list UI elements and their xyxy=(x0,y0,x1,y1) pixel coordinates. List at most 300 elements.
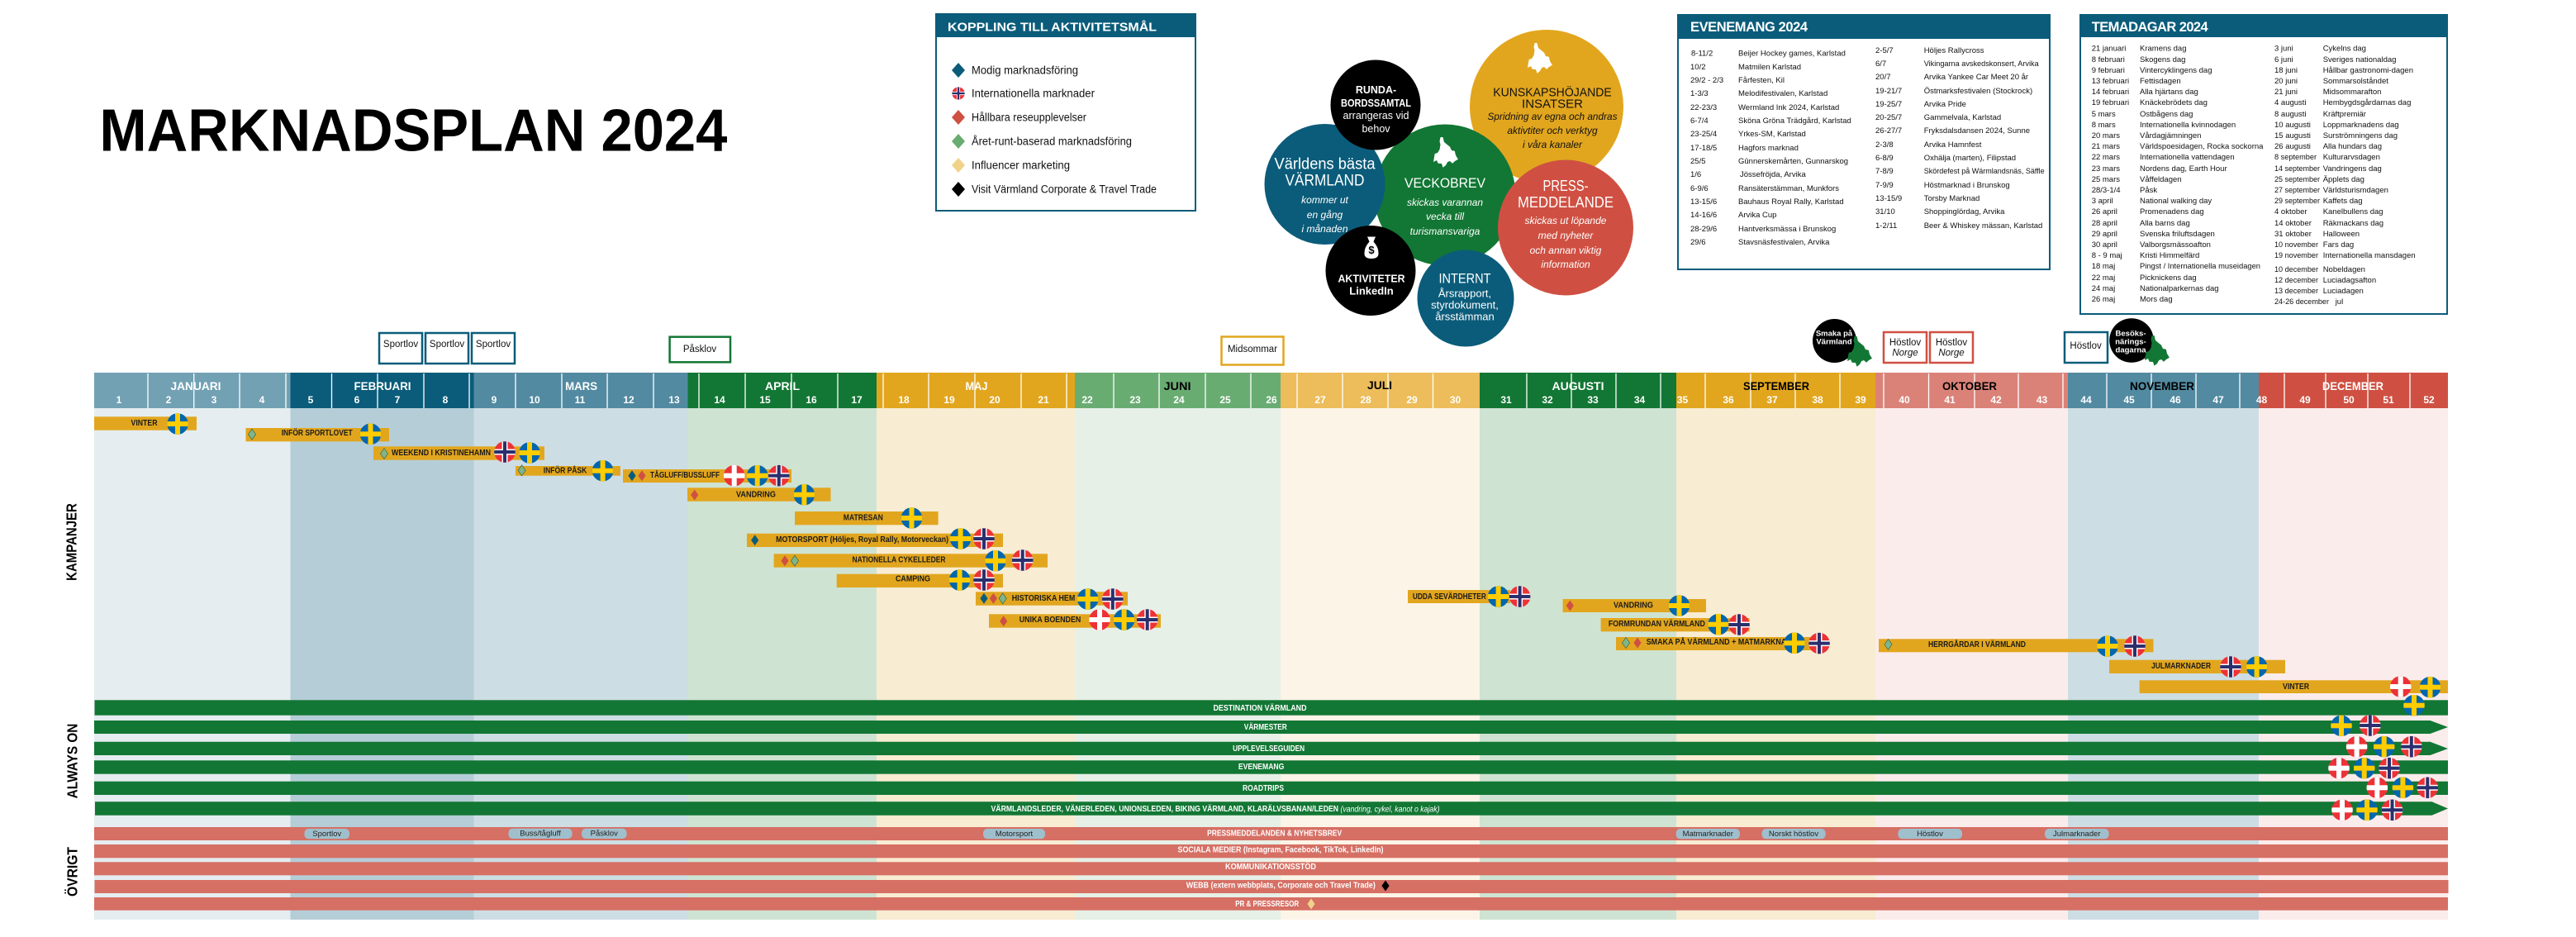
section label: övrigt: ÖVRIGT xyxy=(64,847,80,897)
holiday: höstlov norge vecka 41: Norge xyxy=(1938,349,1965,359)
panel: legend koppling till aktivitetsmål xyxy=(935,13,1196,211)
list: temadagar juni–december: Luciadagen xyxy=(2323,287,2364,296)
campaign rows xyxy=(94,413,2448,698)
always on: evenemang xyxy=(94,758,2448,779)
list: temadagar januari–maj: Valborgsmässoafton xyxy=(2140,240,2211,250)
list: temadagar juni–december: 6 juni xyxy=(2274,55,2293,64)
campaign: vandring vår: VANDRING xyxy=(736,491,776,499)
list: temadagar januari–maj: 28/3-1/4 xyxy=(2092,186,2121,195)
always on: destination värmland: DESTINATION VÄRMLAND xyxy=(1213,702,1307,713)
list: temadagar juni–december: Sommarsolståndet xyxy=(2323,77,2388,86)
campaign: motorsport xyxy=(747,528,1003,549)
month labels: AUGUSTI xyxy=(1552,379,1604,392)
week numbers: 52 xyxy=(2423,394,2435,406)
list: evenemang juli–november: 13-15/9 xyxy=(1875,194,1902,203)
bubble: kunskapshöjande insatser: i våra kanaler xyxy=(1523,139,1583,150)
week numbers: 8 xyxy=(443,394,449,406)
week numbers: 39 xyxy=(1855,394,1866,406)
holiday: sportlov vecka 8 xyxy=(425,333,468,364)
list: temadagar juni–december: 8 augusti xyxy=(2274,110,2307,119)
panel: evenemang 2024: EVENEMANG 2024 xyxy=(1690,20,1808,35)
week numbers: 18 xyxy=(898,394,910,406)
month labels: JANUARI xyxy=(170,379,221,392)
event bubble: smaka på värmland xyxy=(1813,319,1872,367)
week numbers: 13 xyxy=(668,394,680,406)
list: evenemang januari–juni: 13-15/6 xyxy=(1690,197,1717,207)
holiday: sportlov vecka 9: Sportlov xyxy=(476,340,511,350)
legend item: hållbara reseupplevelser: Hållbara reseupplevelser xyxy=(972,111,1086,124)
bubble: pressmeddelande: PRESS- xyxy=(1543,178,1588,194)
always-on rows xyxy=(94,695,2448,820)
övrigt: sociala medier: SOCIALA MEDIER (Instagram, Facebook, TikTok, LinkedIn) xyxy=(1178,846,1383,854)
legend item: visit värmland corporate & travel trade: Visit Värmland Corporate & Travel Trade xyxy=(972,183,1157,195)
campaign: unika boenden: UNIKA BOENDEN xyxy=(1019,616,1081,625)
list: temadagar januari–maj: Alla hjärtans dag xyxy=(2140,88,2198,97)
holiday: påsklov xyxy=(670,337,730,362)
list: temadagar juni–december: 10 augusti xyxy=(2274,121,2311,130)
campaign: herrgårdar i värmland: HERRGÅRDAR I VÄRMLAND xyxy=(1928,639,2026,649)
campaign: herrgårdar i värmland xyxy=(1879,635,2153,657)
list: evenemang januari–juni: 8-11/2 xyxy=(1691,50,1713,58)
event bubble: smaka på värmland: Smaka på xyxy=(1816,329,1853,339)
holiday: höstlov norge vecka 40 xyxy=(1884,332,1927,363)
legend item: året-runt-baserad marknadsföring: Året-runt-baserad marknadsföring xyxy=(972,136,1132,147)
bubble: internt xyxy=(1418,250,1514,347)
week numbers: 5 xyxy=(308,394,314,406)
list: evenemang januari–juni xyxy=(1690,50,1851,247)
bubble: kunskapshöjande insatser: aktivtiter och verktyg xyxy=(1507,125,1598,136)
legend item: modig marknadsföring: Modig marknadsföring xyxy=(972,64,1078,76)
week numbers: 4 xyxy=(259,394,265,406)
list: temadagar januari–maj: 26 maj xyxy=(2092,295,2115,304)
pill: sportlov: Sportlov xyxy=(312,830,341,839)
list: evenemang juli–november: Skördefest på Wärmlandsnäs, Säffle xyxy=(1924,167,2045,176)
month labels: FEBRUARI xyxy=(354,379,411,392)
list: evenemang januari–juni: Hantverksmässa i Brunskog xyxy=(1738,225,1836,234)
list: evenemang juli–november: 20-25/7 xyxy=(1875,113,1902,122)
list: temadagar juni–december: Vandringens dag xyxy=(2323,164,2382,174)
list: evenemang juli–november: 19-25/7 xyxy=(1875,100,1902,109)
list: temadagar juni–december: Internationella mansdagen xyxy=(2323,251,2416,260)
list: temadagar januari–maj: 9 februari xyxy=(2092,66,2125,75)
month labels: OKTOBER xyxy=(1942,379,1997,392)
list: temadagar juni–december: Nobeldagen xyxy=(2323,265,2365,274)
bubble: pressmeddelande xyxy=(1498,160,1633,296)
list: temadagar juni–december: Alla hundars dag xyxy=(2323,142,2382,151)
list: temadagar juni–december: Sveriges nationaldag xyxy=(2323,55,2396,64)
list: temadagar januari–maj: Pingst / Internationella museidagen xyxy=(2140,262,2260,271)
list: temadagar januari–maj: 21 januari xyxy=(2092,45,2126,53)
bubble: världens bästa värmland: en gång xyxy=(1307,209,1343,221)
list: temadagar juni–december: Midsommarafton xyxy=(2323,88,2381,97)
list: temadagar januari–maj: Internationella vattendagen xyxy=(2140,153,2235,162)
panel: temadagar 2024: TEMADAGAR 2024 xyxy=(2092,20,2209,35)
list: evenemang januari–juni: Hagfors marknad xyxy=(1738,144,1799,153)
list: evenemang januari–juni: 1/6 xyxy=(1690,170,1701,179)
list: evenemang juli–november: Gammelvala, Karlstad xyxy=(1924,113,2001,122)
list: evenemang januari–juni: Fårfesten, Kil xyxy=(1738,76,1785,85)
list: evenemang januari–juni: 6-7/4 xyxy=(1690,117,1709,126)
week numbers: 46 xyxy=(2170,394,2181,406)
list: temadagar juni–december: Surströmningens dag xyxy=(2323,131,2398,140)
list: temadagar januari–maj: 21 mars xyxy=(2092,142,2120,151)
övrigt: pr & pressresor: PR & PRESSRESOR xyxy=(1235,900,1300,909)
list: temadagar juni–december: Fars dag xyxy=(2323,240,2354,250)
holiday: sportlov vecka 7 xyxy=(379,333,422,364)
list: temadagar juni–december: Kanelbullens dag xyxy=(2323,207,2384,216)
bubble: världens bästa värmland: VÄRMLAND xyxy=(1286,172,1365,190)
list: temadagar januari–maj: 13 februari xyxy=(2092,77,2129,86)
always on: destination värmland xyxy=(94,695,2448,716)
list: evenemang juli–november: 31/10 xyxy=(1875,207,1895,216)
legend item: internationella marknader: Internationella marknader xyxy=(972,88,1095,99)
bubble: aktiviteter linkedin: LinkedIn xyxy=(1349,284,1394,297)
campaign: vinter start: VINTER xyxy=(131,419,158,428)
list: evenemang januari–juni: Stavsnäsfestivalen, Arvika xyxy=(1738,238,1830,247)
week numbers: 29 xyxy=(1406,394,1418,406)
list: temadagar januari–maj: Picknickens dag xyxy=(2140,273,2197,283)
holiday: sportlov vecka 8: Sportlov xyxy=(430,340,464,350)
övrigt: webb xyxy=(94,880,2449,893)
week numbers: 14 xyxy=(714,394,725,406)
always on: evenemang: EVENEMANG xyxy=(1238,763,1285,772)
list: evenemang juli–november: Shoppinglördag, Arvika xyxy=(1924,207,2005,216)
week numbers: 9 xyxy=(492,394,497,406)
week numbers: 7 xyxy=(395,394,401,406)
icon: värmland silhouette white xyxy=(1528,43,1552,74)
övrigt: pressmeddelanden & nyhetsbrev: PRESSMEDDELANDEN & NYHETSBREV xyxy=(1207,830,1342,838)
campaign: formrundan värmland xyxy=(1601,614,1750,635)
list: temadagar januari–maj: Skogens dag xyxy=(2140,55,2185,64)
week numbers: 38 xyxy=(1812,394,1823,406)
month labels: APRIL xyxy=(765,379,800,392)
holiday: höstlov norge vecka 41: Höstlov xyxy=(1936,338,1967,348)
week numbers: 12 xyxy=(623,394,634,406)
week numbers: 11 xyxy=(575,394,586,406)
bubble: pressmeddelande: MEDDELANDE xyxy=(1518,194,1614,211)
list: evenemang januari–juni: Beijer Hockey games, Karlstad xyxy=(1738,50,1846,58)
list: evenemang juli–november: Arvika Yankee Car Meet 20 år xyxy=(1924,73,2028,82)
week numbers: 25 xyxy=(1219,394,1231,406)
week numbers: 31 xyxy=(1500,394,1512,406)
list: temadagar juni–december: Kulturarvsdagen xyxy=(2323,153,2380,162)
holiday: midsommar xyxy=(1221,337,1284,365)
bubble: internt: INTERNT xyxy=(1439,271,1490,286)
list: evenemang januari–juni: 29/2 - 2/3 xyxy=(1690,76,1723,85)
list: evenemang januari–juni: 10/2 xyxy=(1690,63,1705,72)
övrigt: kommunikationsstöd xyxy=(94,861,2448,875)
list: evenemang januari–juni: Gûnnerskemårten, Gunnarskog xyxy=(1738,157,1848,166)
list: evenemang juli–november: Torsby Marknad xyxy=(1924,194,1980,203)
campaign: camping: CAMPING xyxy=(896,575,930,583)
list: evenemang januari–juni: Sköna Gröna Trädgård, Karlstad xyxy=(1738,117,1851,126)
month labels xyxy=(170,378,2384,392)
list: temadagar januari–maj: 22 maj xyxy=(2092,273,2115,283)
list: evenemang januari–juni: 1-3/3 xyxy=(1690,89,1709,98)
always on: värmlandsleder xyxy=(95,799,2448,820)
campaign: vandring vår xyxy=(687,484,831,506)
list: evenemang juli–november: Höstmarknad i Brunskog xyxy=(1924,181,2010,190)
event bubble: besöksnäringsdagarna: dagarna xyxy=(2116,345,2146,355)
section label: always on: ALWAYS ON xyxy=(64,724,80,798)
month labels: MARS xyxy=(565,379,597,392)
bubble: världens bästa värmland: kommer ut xyxy=(1301,194,1348,206)
week numbers: 50 xyxy=(2343,394,2355,406)
list: temadagar januari–maj: Internationella kvinnodagen xyxy=(2140,121,2236,130)
week numbers: 16 xyxy=(806,394,817,406)
bubble: veckobrev: vecka till xyxy=(1426,211,1464,222)
list: evenemang juli–november: Oxhälja (marten), Filipstad xyxy=(1924,154,2016,163)
list: temadagar januari–maj: Knäckebrödets dag xyxy=(2140,98,2208,107)
list: evenemang januari–juni: 14-16/6 xyxy=(1690,211,1717,220)
holiday: höstlov norge vecka 40: Norge xyxy=(1892,349,1918,359)
legend item: modig marknadsföring xyxy=(952,63,1078,78)
list: temadagar juni–december: 24-26 december xyxy=(2274,297,2329,307)
panel: evenemang 2024 xyxy=(1677,14,2051,269)
bubble: världens bästa värmland: Världens bästa xyxy=(1274,155,1376,174)
week numbers: 33 xyxy=(1587,394,1599,406)
list: temadagar januari–maj: Vintercyklingens dag xyxy=(2140,66,2212,75)
always on: värmester: VÄRMESTER xyxy=(1244,721,1287,732)
week numbers: 44 xyxy=(2080,394,2092,406)
campaign: tågluff/bussluff: TÅGLUFF/BUSSLUFF xyxy=(650,469,720,480)
list: evenemang januari–juni: 25/5 xyxy=(1690,157,1705,166)
campaign: historiska hem: HISTORISKA HEM xyxy=(1012,594,1075,603)
always on: roadtrips xyxy=(94,777,2448,798)
week numbers: 27 xyxy=(1314,394,1326,406)
list: evenemang januari–juni: Matmilen Karlstad xyxy=(1738,63,1801,72)
list: evenemang juli–november: Höljes Rallycross xyxy=(1924,46,1984,55)
list: evenemang juli–november: 7-8/9 xyxy=(1875,167,1894,176)
list: temadagar juni–december: 19 november xyxy=(2274,251,2318,260)
month labels: JUNI xyxy=(1163,379,1191,392)
bubble: pressmeddelande: information xyxy=(1541,259,1590,270)
list: temadagar juni–december: 4 oktober xyxy=(2274,207,2307,216)
list: temadagar januari–maj: 8 mars xyxy=(2092,121,2116,130)
pill: höstlov: Höstlov xyxy=(1917,830,1943,839)
list: temadagar januari–maj: Svenska friluftsdagen xyxy=(2140,230,2215,239)
week numbers: 2 xyxy=(166,394,172,406)
campaign: vandring höst: VANDRING xyxy=(1614,602,1653,610)
list: temadagar juni–december: 10 november xyxy=(2274,240,2318,250)
list: temadagar juni–december: Cykelns dag xyxy=(2323,45,2366,53)
list: temadagar juni–december: 29 september xyxy=(2274,197,2320,206)
list: temadagar januari–maj: 29 april xyxy=(2092,230,2117,239)
pill: buss/tågluff: Buss/tågluff xyxy=(520,830,561,838)
week numbers: 30 xyxy=(1450,394,1461,406)
bubble: internt: Årsrapport, xyxy=(1438,288,1491,299)
campaign: inför sportlovet xyxy=(246,423,389,445)
holiday: höstlov: Höstlov xyxy=(2070,341,2102,351)
list: temadagar juni–december: 14 september xyxy=(2274,164,2320,174)
section label: kampanjer: KAMPANJER xyxy=(64,503,80,581)
list: temadagar juni–december: Hållbar gastronomi-dagen xyxy=(2323,66,2413,75)
list: evenemang januari–juni: Melodifestivalen, Karlstad xyxy=(1738,89,1827,98)
campaign: vinter slut: VINTER xyxy=(2283,683,2310,692)
timeline header: months and weeks xyxy=(94,373,2448,408)
list: temadagar januari–maj: 3 april xyxy=(2092,197,2113,206)
week numbers: 42 xyxy=(1990,394,2002,406)
always on: värmlandsleder: VÄRMLANDSLEDER, VÄNERLEDEN, UNIONSLEDEN, BIKING VÄRMLAND, KLARÄLVSBANAN/LEDEN (vandring, cykel, kanot o kajak) xyxy=(991,803,1439,814)
week numbers: 26 xyxy=(1266,394,1277,406)
list: temadagar juni–december: 27 september xyxy=(2274,186,2320,195)
list: temadagar januari–maj: 14 februari xyxy=(2092,88,2129,97)
övrigt: sociala medier xyxy=(94,844,2448,858)
list: evenemang januari–juni: Yrkes-SM, Karlstad xyxy=(1738,130,1806,139)
week numbers: 43 xyxy=(2037,394,2047,406)
campaign: udda sevärdheter xyxy=(1408,586,1531,607)
week numbers: 21 xyxy=(1038,394,1049,406)
list: temadagar juni–december: 31 oktober xyxy=(2274,230,2312,239)
campaign: camping xyxy=(837,569,1003,591)
list: temadagar januari–maj: 18 maj xyxy=(2092,262,2115,271)
month labels: JULI xyxy=(1367,378,1392,392)
week numbers: 32 xyxy=(1542,394,1553,406)
campaign: formrundan värmland: FORMRUNDAN VÄRMLAND xyxy=(1609,618,1705,629)
list: temadagar juni–december: Räkmackans dag xyxy=(2323,219,2384,228)
bubble: kunskapshöjande insatser: Spridning av egna och andras xyxy=(1487,111,1618,122)
list: temadagar juni–december: Hembygdsgårdarnas dag xyxy=(2323,98,2411,107)
list: temadagar januari–maj: 22 mars xyxy=(2092,153,2120,162)
list: temadagar juni–december: Kaffets dag xyxy=(2323,197,2363,206)
holiday markers above timeline xyxy=(379,318,2170,367)
month labels: MAJ xyxy=(965,379,988,392)
always on: värmester xyxy=(94,715,2448,736)
list: evenemang januari–juni: 29/6 xyxy=(1690,238,1705,247)
week numbers: 48 xyxy=(2256,394,2267,406)
list: temadagar juni–december: Äpplets dag xyxy=(2323,175,2365,184)
pill: norskt höstlov: Norskt höstlov xyxy=(1769,830,1818,839)
list: evenemang januari–juni: 22-23/3 xyxy=(1690,103,1717,112)
campaign: weekend i kristinehamn: WEEKEND I KRISTINEHAMN xyxy=(392,449,491,458)
pill: matmarknader: Matmarknader xyxy=(1683,830,1733,839)
list: evenemang juli–november: 1-2/11 xyxy=(1875,221,1897,231)
bubble: internt: styrdokument, xyxy=(1431,299,1499,311)
list: evenemang juli–november: Fryksdalsdansen 2024, Sunne xyxy=(1924,126,2030,136)
panel: legend koppling till aktivitetsmål: KOPPLING TILL AKTIVITETSMÅL xyxy=(948,20,1157,35)
pill: buss/tågluff xyxy=(508,829,573,839)
list: temadagar januari–maj: 25 mars xyxy=(2092,175,2120,184)
list: evenemang juli–november: 6/7 xyxy=(1875,59,1886,69)
bubble: världens bästa värmland: i månaden xyxy=(1301,223,1348,235)
list: evenemang juli–november: Vikingarna avskedskonsert, Arvika xyxy=(1924,59,2039,69)
list: temadagar januari–maj: 8 - 9 maj xyxy=(2092,251,2122,260)
bubble: kunskapshöjande insatser: INSATSER xyxy=(1522,98,1583,111)
list: evenemang juli–november: 20/7 xyxy=(1875,73,1890,82)
list: temadagar januari–maj: 20 mars xyxy=(2092,131,2120,140)
list: evenemang juli–november: Östmarksfestivalen (Stockrock) xyxy=(1924,87,2032,96)
övrigt: webb: WEBB (extern webbplats, Corporate och Travel Trade) xyxy=(1186,881,1376,891)
list: temadagar juni–december: 21 juni xyxy=(2274,88,2298,97)
list: temadagar januari–maj: 5 mars xyxy=(2092,110,2116,119)
holiday: midsommar: Midsommar xyxy=(1228,345,1277,354)
pill: julmarknader: Julmarknader xyxy=(2053,830,2101,839)
list: evenemang januari–juni: 6-9/6 xyxy=(1690,184,1709,193)
list: temadagar januari–maj: National walking day xyxy=(2140,197,2212,206)
list: evenemang juli–november: Arvika Pride xyxy=(1924,100,1966,109)
week numbers: 41 xyxy=(1944,394,1956,406)
pill: sportlov xyxy=(304,829,349,839)
list: temadagar juni–december: Halloween xyxy=(2323,230,2360,239)
list: evenemang januari–juni: 28-29/6 xyxy=(1690,225,1717,234)
list: evenemang januari–juni: Ransäterstämman, Munkfors xyxy=(1738,184,1839,193)
list: temadagar juni–december xyxy=(2274,45,2416,307)
list: temadagar januari–maj: Världspoesidagen, Rocka sockorna xyxy=(2140,142,2264,151)
list: temadagar januari–maj: Alla barns dag xyxy=(2140,219,2190,228)
list: evenemang juli–november: 7-9/9 xyxy=(1875,181,1894,190)
list: evenemang juli–november: Beer & Whiskey mässan, Karlstad xyxy=(1924,221,2042,231)
list: evenemang juli–november xyxy=(1875,46,2045,231)
week numbers: 10 xyxy=(529,394,540,406)
list: temadagar januari–maj: 28 april xyxy=(2092,219,2117,228)
campaign: julmarknader xyxy=(2109,656,2285,678)
week numbers: 37 xyxy=(1766,394,1778,406)
week numbers: 49 xyxy=(2299,394,2311,406)
week numbers: 22 xyxy=(1081,394,1093,406)
campaign: historiska hem xyxy=(976,588,1128,610)
list: temadagar juni–december: 25 september xyxy=(2274,175,2320,184)
list: temadagar juni–december: 13 december xyxy=(2274,287,2318,296)
holiday: höstlov xyxy=(2065,332,2108,363)
campaign: julmarknader: JULMARKNADER xyxy=(2151,662,2212,671)
bubble: veckobrev: VECKOBREV xyxy=(1404,176,1485,191)
campaign: matresan: MATRESAN xyxy=(844,514,883,522)
bubble: veckobrev xyxy=(1375,124,1515,266)
list: temadagar januari–maj: Promenadens dag xyxy=(2140,207,2204,216)
bubble: rundabordssamtal: RUNDA- xyxy=(1356,84,1396,96)
list: temadagar juni–december: 15 augusti xyxy=(2274,131,2311,140)
holiday: sportlov vecka 9 xyxy=(472,333,515,364)
campaign: smaka på värmland + matmarknad: SMAKA PÅ VÄRMLAND + MATMARKNAD xyxy=(1647,636,1792,647)
holiday: höstlov norge vecka 41 xyxy=(1930,332,1973,363)
list: evenemang januari–juni: 23-25/4 xyxy=(1690,130,1717,139)
legend item: influencer marketing xyxy=(952,158,1070,173)
week numbers: 24 xyxy=(1173,394,1185,406)
week numbers: 40 xyxy=(1899,394,1910,406)
legend item: hållbara reseupplevelser xyxy=(952,110,1086,125)
week numbers: 47 xyxy=(2212,394,2224,406)
övrigt: kommunikationsstöd: KOMMUNIKATIONSSTÖD xyxy=(1225,861,1316,872)
week numbers: 19 xyxy=(943,394,955,406)
always on: roadtrips: ROADTRIPS xyxy=(1243,784,1284,793)
övrigt rows xyxy=(94,827,2449,911)
always on: upplevelseguiden: UPPLEVELSEGUIDEN xyxy=(1233,744,1305,754)
week numbers xyxy=(116,394,2435,406)
week numbers: 28 xyxy=(1360,394,1371,406)
list: temadagar juni–december: 12 december xyxy=(2274,276,2318,285)
list: temadagar januari–maj: Kristi Himmelfärd xyxy=(2140,251,2199,260)
pill: motorsport xyxy=(983,829,1045,839)
list: temadagar januari–maj: 26 april xyxy=(2092,207,2117,216)
list: temadagar juni–december: Världsturismdagen xyxy=(2323,186,2388,195)
list: temadagar januari–maj: Fettisdagen xyxy=(2140,77,2181,86)
list: temadagar juni–december: Loppmarknadens dag xyxy=(2323,121,2399,130)
list: temadagar juni–december: 18 juni xyxy=(2274,66,2298,75)
panel: temadagar 2024 xyxy=(2079,14,2448,314)
bubble: rundabordssamtal xyxy=(1330,59,1421,150)
bubble: kunskapshöjande insatser: KUNSKAPSHÖJANDE xyxy=(1493,84,1612,99)
list: evenemang januari–juni: Arvika Cup xyxy=(1738,211,1776,220)
list: temadagar januari–maj: Nordens dag, Earth Hour xyxy=(2140,164,2227,174)
icon: värmland silhouette white small xyxy=(1433,137,1458,168)
campaign: motorsport: MOTORSPORT (Höljes, Royal Rally, Motorveckan) xyxy=(776,535,948,545)
campaign: vinter start xyxy=(94,413,197,435)
icon: money bag: $ xyxy=(1368,244,1375,256)
bubble: rundabordssamtal: behov xyxy=(1362,123,1390,135)
list: temadagar juni–december: 14 oktober xyxy=(2274,219,2312,228)
bubble: aktiviteter linkedin: AKTIVITETER xyxy=(1338,273,1405,284)
bubble: veckobrev: skickas varannan xyxy=(1407,197,1483,208)
